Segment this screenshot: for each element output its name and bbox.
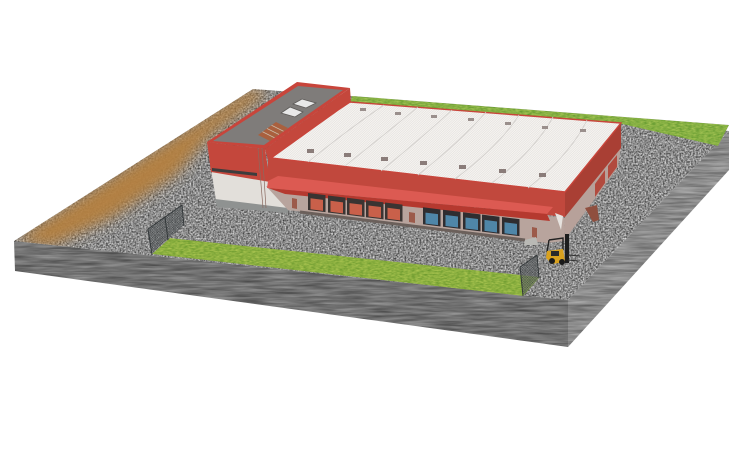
office east wall xyxy=(265,88,351,160)
icon: forklift xyxy=(546,234,580,265)
back grass strip xyxy=(350,96,729,146)
roof vents, front row xyxy=(307,149,546,177)
dock platform line xyxy=(300,212,525,240)
office white wall xyxy=(211,168,288,212)
canopy fascia xyxy=(268,188,550,221)
exterior stair xyxy=(585,205,599,222)
canopy xyxy=(267,176,553,214)
roof vents, back row xyxy=(360,108,586,132)
right red fascia xyxy=(565,123,621,217)
gravel surface xyxy=(14,89,729,300)
office window strip xyxy=(212,168,257,176)
block right face xyxy=(568,131,729,347)
left fence xyxy=(148,205,184,255)
ladder xyxy=(258,148,266,208)
front grass strip xyxy=(152,238,540,296)
personnel doors xyxy=(292,198,537,238)
white corner triangle xyxy=(555,213,563,230)
concrete pad xyxy=(524,237,538,245)
roof seams xyxy=(308,105,587,188)
main roof xyxy=(271,102,621,192)
orange dock doors xyxy=(308,193,402,222)
right side wall xyxy=(564,147,621,241)
warehouse building xyxy=(207,82,621,245)
right fence xyxy=(520,255,539,296)
skylight 2 xyxy=(281,107,303,117)
skylight 1 xyxy=(293,99,316,108)
site block xyxy=(14,89,729,347)
right wall door 1 xyxy=(595,170,605,197)
blue dock doors xyxy=(423,207,520,236)
illustration: warehouse on a site block xyxy=(14,82,729,347)
front red wall xyxy=(268,158,565,217)
office red wall xyxy=(207,142,270,182)
block front face xyxy=(14,241,568,347)
office base xyxy=(215,199,288,213)
dock wall xyxy=(266,186,565,243)
brown gravel area xyxy=(14,89,268,246)
right wall door 2 xyxy=(608,155,617,179)
solar panels xyxy=(258,122,288,141)
office roof xyxy=(207,82,350,149)
